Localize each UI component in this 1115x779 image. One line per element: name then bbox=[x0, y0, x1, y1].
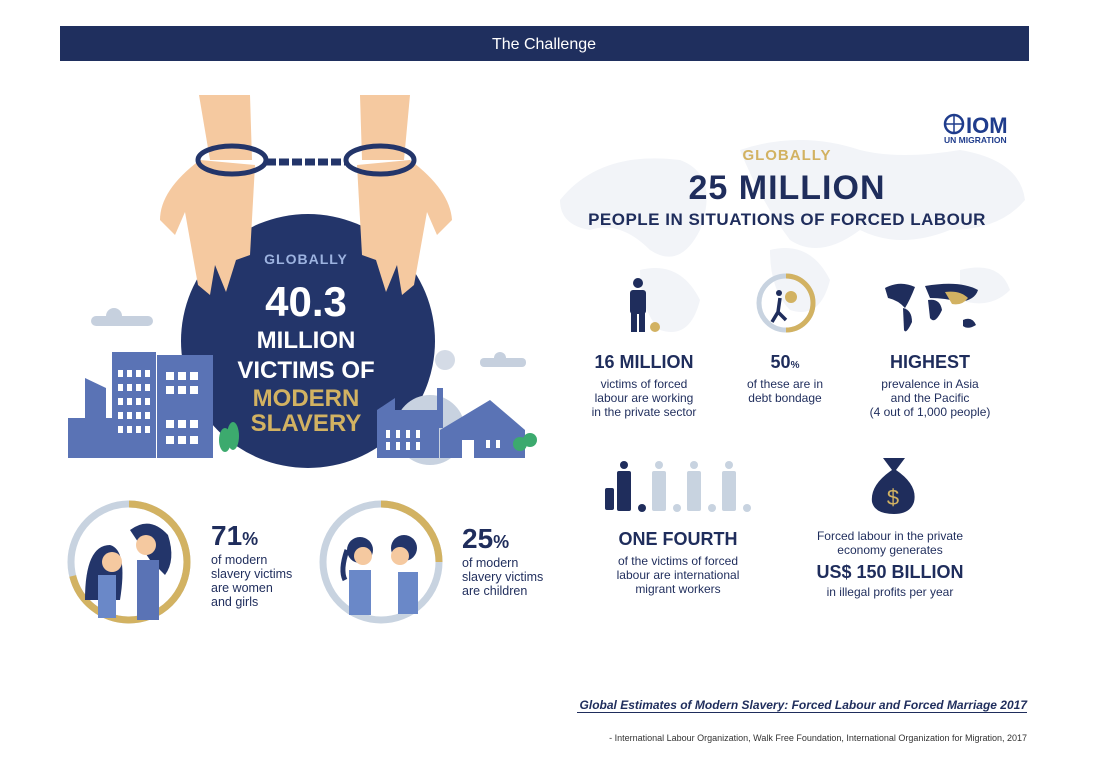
globe headline text bbox=[237, 251, 375, 437]
stat: 16 million: 16 MILLION bbox=[594, 352, 694, 372]
stat: highest prevalence: and the Pacific bbox=[891, 391, 969, 405]
citation source: - International Labour Organization, Walk Free Foundation, International Organization for Migration, 2017 bbox=[609, 733, 1027, 743]
stat: 16 million: victims of forced bbox=[601, 377, 687, 391]
stat: highest prevalence: HIGHEST bbox=[890, 352, 970, 372]
stat: one fourth: migrant workers bbox=[635, 582, 721, 596]
stat: US$ 150 billion bbox=[816, 458, 964, 599]
stat: one fourth: labour are international bbox=[617, 568, 739, 582]
IOM logo: UN MIGRATION bbox=[944, 135, 1007, 145]
stat: women and girls: 71% bbox=[211, 520, 258, 551]
stat: 50% debt bondage: 50% bbox=[771, 352, 800, 372]
headline: 25 million: PEOPLE IN SITUATIONS OF FORCED LABOUR bbox=[588, 210, 986, 229]
globe headline text: MODERN bbox=[253, 385, 359, 412]
stat: 16 million: in the private sector bbox=[592, 405, 696, 419]
stat: children: slavery victims bbox=[462, 570, 543, 584]
stat: one fourth: ONE FOURTH bbox=[618, 529, 738, 549]
IOM logo: IOM bbox=[966, 113, 1008, 138]
header bar: The Challenge bbox=[492, 36, 596, 53]
stat: one fourth bbox=[605, 461, 751, 596]
globe headline text: GLOBALLY bbox=[264, 251, 348, 267]
stat: 50% debt bondage: debt bondage bbox=[748, 391, 822, 405]
globe bbox=[181, 214, 435, 468]
stat: women and girls bbox=[71, 504, 292, 620]
globe headline text: MILLION bbox=[257, 327, 355, 354]
stat: US$ 150 billion: economy generates bbox=[837, 543, 943, 557]
globe headline text: 40.3 bbox=[265, 278, 347, 325]
icon: handcuffed hands bbox=[160, 95, 452, 295]
headline: 25 million: 25 MILLION bbox=[688, 169, 886, 207]
stat: 50% debt bondage bbox=[747, 276, 823, 405]
stat: 16 million bbox=[592, 278, 696, 419]
stat: US$ 150 billion: US$ 150 BILLION bbox=[816, 562, 964, 582]
stat: women and girls: are women bbox=[211, 581, 273, 595]
background world map bbox=[560, 140, 1025, 332]
header bar bbox=[60, 26, 1029, 61]
tree bbox=[219, 422, 239, 452]
stat: children bbox=[323, 504, 543, 620]
stat: US$ 150 billion: Forced labour in the private bbox=[817, 529, 963, 543]
city background bbox=[68, 308, 537, 465]
globe headline text: SLAVERY bbox=[251, 410, 361, 437]
headline: 25 million: GLOBALLY bbox=[742, 147, 832, 164]
stat: US$ 150 billion: $ bbox=[887, 485, 899, 510]
stat: 50% debt bondage: of these are in bbox=[747, 377, 823, 391]
headline: 25 million bbox=[588, 147, 986, 229]
stat: children: are children bbox=[462, 584, 527, 598]
stat: women and girls: slavery victims bbox=[211, 567, 292, 581]
globe headline text: VICTIMS OF bbox=[237, 357, 375, 384]
stat: children: 25% bbox=[462, 523, 509, 554]
stat: highest prevalence: prevalence in Asia bbox=[881, 377, 979, 391]
stat: women and girls: and girls bbox=[211, 595, 258, 609]
stat: highest prevalence: (4 out of 1,000 people) bbox=[870, 405, 990, 419]
stat: women and girls: of modern bbox=[211, 553, 267, 567]
stat: US$ 150 billion: in illegal profits per year bbox=[827, 585, 953, 599]
stat: 16 million: labour are working bbox=[595, 391, 693, 405]
stat: highest prevalence bbox=[870, 284, 990, 419]
stat: one fourth: of the victims of forced bbox=[618, 554, 738, 568]
stat: children: of modern bbox=[462, 556, 518, 570]
IOM logo bbox=[944, 113, 1008, 145]
citation title: Global Estimates of Modern Slavery: Forced Labour and Forced Marriage 2017 bbox=[580, 698, 1028, 712]
